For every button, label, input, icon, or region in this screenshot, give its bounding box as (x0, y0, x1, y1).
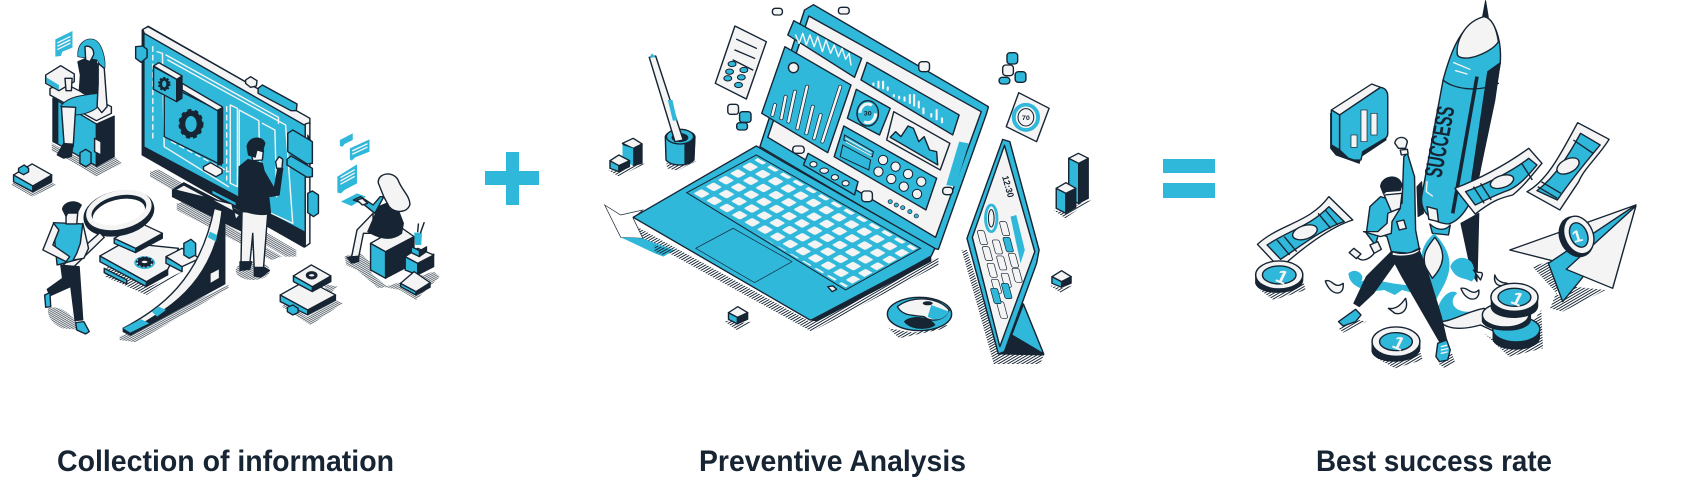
stacked platforms bottom (280, 265, 343, 325)
laptop shadow (633, 227, 938, 332)
paper plane: 1 (1570, 225, 1585, 247)
button strip (803, 153, 858, 195)
tablet (962, 139, 1044, 364)
panel: preventive analysis illustration (605, 5, 1092, 364)
speech bubbles (337, 133, 369, 193)
panel: collection of information illustration (11, 26, 440, 342)
floating blocks (728, 7, 1026, 130)
woman sitting on tower (46, 31, 122, 177)
cubes left (608, 138, 646, 177)
receipt paper (605, 205, 676, 257)
speech bubble with chart (1331, 84, 1388, 163)
laptop screen (760, 5, 988, 249)
gear window (164, 83, 223, 165)
rocket flames (1325, 233, 1507, 333)
magnifier platforms (100, 223, 200, 295)
man with magnifier (43, 186, 154, 334)
donut panel (847, 89, 890, 135)
small cubes (725, 271, 1075, 330)
small box left (11, 164, 56, 197)
sparkline panel (861, 62, 959, 135)
monitor tabs (136, 46, 318, 217)
banknotes (1257, 123, 1609, 268)
small gear card (154, 63, 182, 102)
paper plane (1510, 205, 1636, 312)
ramp (120, 208, 228, 342)
coins: 1 (1272, 266, 1291, 289)
celebrating person (1338, 137, 1455, 368)
sliders card (715, 26, 766, 99)
ring card 70 (1006, 93, 1049, 142)
wave panel (788, 21, 862, 77)
rocket: SUCCESS (1420, 104, 1461, 179)
panel: best success rate illustration (1256, 1, 1636, 368)
donut panel: 30 (864, 111, 872, 118)
stylus in cup (649, 53, 696, 171)
caption: best success rate: Best success rate (1316, 445, 1552, 478)
bar chart panel (762, 47, 851, 153)
seated woman with laptop (341, 174, 440, 300)
standing man (236, 138, 283, 280)
table and dial panel (834, 126, 937, 210)
rocket (1417, 1, 1500, 282)
stand (172, 183, 243, 232)
coins: 1 (1507, 288, 1527, 311)
coins (1256, 261, 1543, 368)
caption: preventive analysis: Preventive Analysis (699, 445, 966, 478)
monitor (142, 26, 310, 260)
3d bars right (1053, 153, 1092, 218)
laptop base (633, 146, 935, 322)
plus sign (485, 152, 539, 205)
tablet: 12:30 (1000, 175, 1016, 199)
equals sign (1163, 159, 1215, 198)
coins: 1 (1389, 333, 1408, 356)
mouse (887, 297, 952, 338)
caption: collection of information: Collection of information (57, 445, 394, 478)
ring card 70: 70 (1022, 115, 1030, 122)
area chart panel (887, 112, 950, 170)
